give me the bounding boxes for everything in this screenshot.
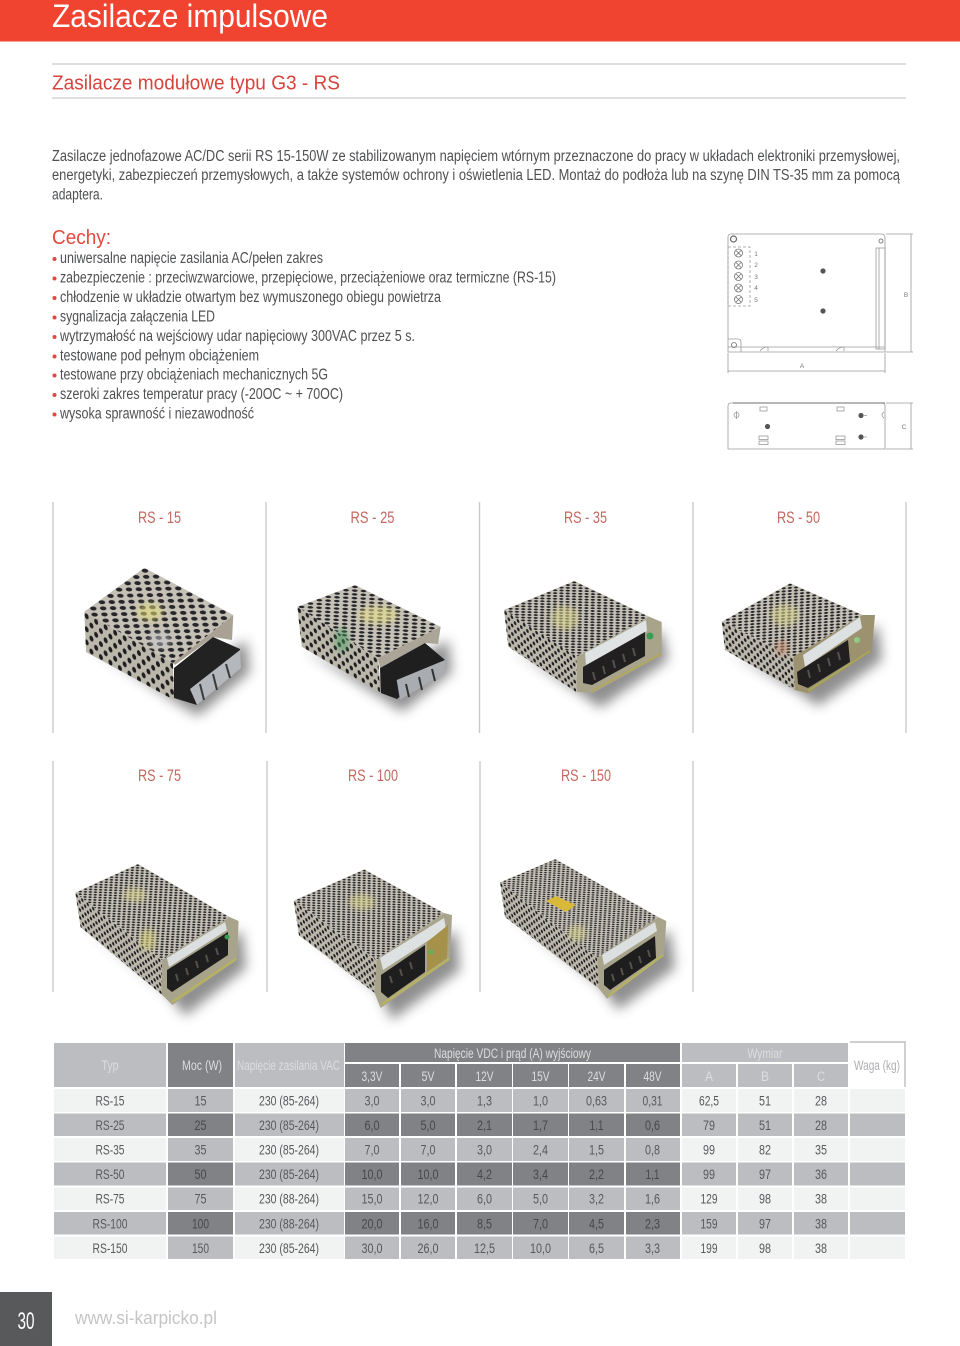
features list: zabezpieczenie : przeciwzwarciowe, przepięciowe, przeciążeniowe oraz termiczne (RS-15) [60, 270, 556, 286]
table row: RS-35: 99 [703, 1142, 715, 1158]
panel dividers: products row 1 [53, 502, 906, 733]
table row: RS-100: 230 (88-264) [259, 1216, 319, 1232]
product: RS-25 [297, 509, 452, 712]
technical drawing: top view labels: 4 [754, 285, 758, 292]
table row: RS-35: 3,0 [477, 1142, 492, 1158]
table row: RS-100 [54, 1212, 905, 1234]
table header: 3,3V [362, 1069, 382, 1084]
table row: RS-35: 2,4 [533, 1142, 548, 1158]
technical drawing: top view [728, 234, 913, 373]
table row: RS-25: 230 (85-264) [259, 1118, 319, 1133]
table row: RS-150: 230 (85-264) [259, 1241, 319, 1256]
product: RS-75: RS - 75 [138, 767, 181, 785]
table row: RS-50: 97 [759, 1167, 771, 1182]
table row: RS-75: 38 [815, 1192, 827, 1206]
table row: RS-75: 230 (88-264) [259, 1192, 319, 1206]
table row: RS-15: 3,0 [364, 1094, 380, 1108]
features list: testowane pod pełnym obciążeniem [60, 348, 259, 364]
table row: RS-35: 1,5 [589, 1142, 604, 1158]
features list: wysoka sprawność i niezawodność [59, 406, 254, 422]
table row: RS-25: 6,0 [364, 1118, 380, 1133]
table row: RS-35: 82 [759, 1142, 771, 1158]
subtitle: Zasilacze modułowe typu G3 - RS [52, 72, 340, 94]
table row: RS-150: 150 [192, 1241, 209, 1256]
table row: RS-25: 2,1 [477, 1118, 492, 1133]
table header: 15V [532, 1069, 550, 1084]
table row: RS-25 [54, 1114, 905, 1136]
table row: RS-100: 4,5 [589, 1216, 604, 1232]
technical drawing: top view labels: 2 [754, 262, 758, 269]
table row: RS-25: 51 [759, 1118, 771, 1133]
table row: RS-100: 100 [192, 1216, 209, 1232]
table row: RS-75: 129 [700, 1192, 718, 1206]
intro paragraph: adaptera. [52, 186, 103, 204]
technical drawing: side view: C [902, 424, 907, 431]
table header: Wymiar [748, 1046, 783, 1061]
table row: RS-150: 3,3 [645, 1241, 660, 1256]
header bar [0, 0, 960, 42]
product: RS-35: RS - 35 [564, 509, 607, 527]
table header: Typ [102, 1058, 118, 1073]
table row: RS-150: 26,0 [418, 1241, 438, 1256]
table row: RS-25: 0,6 [645, 1118, 660, 1133]
table row: RS-15: 1,3 [477, 1094, 492, 1108]
table row: RS-150: 12,5 [474, 1241, 495, 1256]
table row: RS-50: 99 [703, 1167, 715, 1182]
table row: RS-25: 79 [703, 1118, 715, 1133]
table row: RS-50: 50 [194, 1167, 206, 1182]
table row: RS-50: 3,4 [533, 1167, 548, 1182]
table row: RS-75: 15,0 [362, 1192, 382, 1206]
table row: RS-50: 230 (85-264) [259, 1167, 319, 1182]
technical drawing: side view [728, 403, 913, 449]
table header: Moc (W) [182, 1058, 222, 1073]
table row: RS-15: 1,0 [533, 1094, 548, 1108]
technical drawing: top view labels: 3 [754, 274, 758, 281]
table row: RS-150: 98 [759, 1241, 771, 1256]
features list: szeroki zakres temperatur pracy (-20OC ~ + 70OC) [60, 386, 343, 403]
product: RS-150: RS - 150 [561, 767, 611, 785]
table row: RS-35: 35 [815, 1142, 827, 1158]
product: RS-50 [722, 509, 882, 706]
features list: sygnalizacja załączenia LED [60, 308, 215, 326]
table row: RS-25: 28 [815, 1118, 827, 1133]
table row: RS-50: 4,2 [477, 1167, 492, 1182]
table row: RS-15: 15 [194, 1094, 206, 1108]
table row: RS-100: 159 [700, 1216, 718, 1232]
technical drawing: top view labels [754, 251, 908, 370]
table row: RS-25: RS-25 [96, 1118, 124, 1133]
table row: RS-15: 28 [815, 1094, 827, 1108]
features list [52, 250, 556, 422]
table row: RS-50: 10,0 [418, 1167, 438, 1182]
technical drawing: top view labels: 1 [754, 251, 758, 258]
features heading: Cechy: [52, 226, 111, 249]
table row: RS-100: 38 [815, 1216, 827, 1232]
table header: Napięcie zasilania VAC [237, 1058, 340, 1073]
table row: RS-100: RS-100 [92, 1216, 128, 1232]
technical drawing: top view labels: A [800, 363, 805, 370]
product: RS-35 [504, 509, 668, 708]
page number [0, 1292, 52, 1346]
panel dividers: products row 2 [53, 761, 693, 992]
table row: RS-75: 5,0 [533, 1192, 548, 1206]
table row: RS-15: RS-15 [96, 1094, 124, 1108]
table row: RS-150: RS-150 [92, 1241, 128, 1256]
product: RS-150 [500, 767, 675, 1010]
product: RS-25: RS - 25 [350, 509, 394, 527]
product: RS-100: RS - 100 [348, 767, 398, 785]
table row: RS-15 [54, 1089, 905, 1112]
table row: RS-75: 3,2 [589, 1192, 604, 1206]
product: RS-75 [75, 767, 246, 1016]
table row: RS-25: 1,1 [590, 1118, 604, 1133]
table row: RS-35: RS-35 [96, 1142, 124, 1158]
table row: RS-100: 16,0 [418, 1216, 438, 1232]
table header: C [817, 1069, 825, 1084]
table header: B [761, 1069, 769, 1084]
table header: 48V [644, 1069, 662, 1084]
table row: RS-100: 8,5 [477, 1216, 492, 1232]
website url: www.si-karpicko.pl [74, 1307, 217, 1328]
table row: RS-150: 10,0 [530, 1241, 551, 1256]
table row: RS-35: 35 [194, 1142, 206, 1158]
table row: RS-50: 1,1 [646, 1167, 660, 1182]
table row: RS-15: 0,31 [642, 1094, 662, 1108]
table row: RS-50: 2,2 [589, 1167, 604, 1182]
table row: RS-75: 75 [194, 1192, 206, 1206]
table row: RS-100: 20,0 [362, 1216, 382, 1232]
table row: RS-75 [54, 1188, 905, 1210]
table header: 5V [422, 1069, 434, 1084]
table row: RS-75: 98 [759, 1192, 771, 1206]
product: RS-15 [84, 509, 250, 716]
table row: RS-50: 36 [815, 1167, 827, 1182]
table row: RS-35 [54, 1138, 905, 1161]
table row: RS-15: 51 [759, 1094, 771, 1108]
intro paragraph [52, 148, 900, 204]
table row: RS-15: 230 (85-264) [259, 1094, 319, 1108]
table row: RS-50 [54, 1162, 905, 1186]
table row: RS-35: 230 (85-264) [259, 1142, 319, 1158]
features list: testowane przy obciążeniach mechanicznych 5G [60, 366, 328, 384]
table row: RS-100: 2,3 [645, 1216, 660, 1232]
table row: RS-75: 1,6 [645, 1192, 660, 1206]
table header: Napięcie VDC i prąd (A) wyjściowy [434, 1046, 591, 1061]
table row: RS-150 [54, 1236, 905, 1259]
table row: RS-150: 38 [815, 1241, 827, 1256]
table row: RS-100: 7,0 [533, 1216, 548, 1232]
table header: A [705, 1069, 713, 1084]
table row: RS-35: 0,8 [645, 1142, 660, 1158]
table row: RS-15: 3,0 [420, 1094, 436, 1108]
table row: RS-25: 25 [194, 1118, 206, 1133]
table header [54, 1042, 905, 1087]
table row: RS-35: 7,0 [420, 1142, 436, 1158]
table row: RS-25: 5,0 [420, 1118, 436, 1133]
product: RS-50: RS - 50 [777, 509, 820, 527]
table row: RS-75: 6,0 [477, 1192, 492, 1206]
features list: chłodzenie w układzie otwartym bez wymuszonego obiegu powietrza [60, 289, 441, 306]
features list: wytrzymałość na wejściowy udar napięciowy 300VAC przez 5 s. [59, 328, 415, 345]
table header: Waga (kg) [854, 1058, 900, 1073]
table row: RS-50: 10,0 [362, 1167, 382, 1182]
table row: RS-150: 199 [700, 1241, 718, 1256]
table header: 12V [476, 1069, 494, 1084]
technical drawing: top view labels: 5 [754, 297, 758, 304]
table header: 24V [588, 1069, 606, 1084]
product: RS-100 [294, 767, 460, 1020]
table row: RS-75: 12,0 [418, 1192, 438, 1206]
features list: uniwersalne napięcie zasilania AC/pełen zakres [60, 250, 323, 267]
product: RS-15: RS - 15 [138, 509, 181, 527]
table row: RS-15: 62,5 [699, 1094, 719, 1108]
technical drawing: top view labels: B [904, 292, 908, 299]
table row: RS-150: 30,0 [362, 1241, 382, 1256]
table row: RS-25: 1,7 [533, 1118, 548, 1133]
table row: RS-150: 6,5 [589, 1241, 604, 1256]
table row: RS-35: 7,0 [364, 1142, 380, 1158]
table row: RS-100: 97 [759, 1216, 771, 1232]
table row: RS-15: 0,63 [586, 1094, 607, 1108]
table row: RS-50: RS-50 [96, 1167, 124, 1182]
table row: RS-75: RS-75 [96, 1192, 124, 1206]
page number: 30 [18, 1308, 34, 1335]
